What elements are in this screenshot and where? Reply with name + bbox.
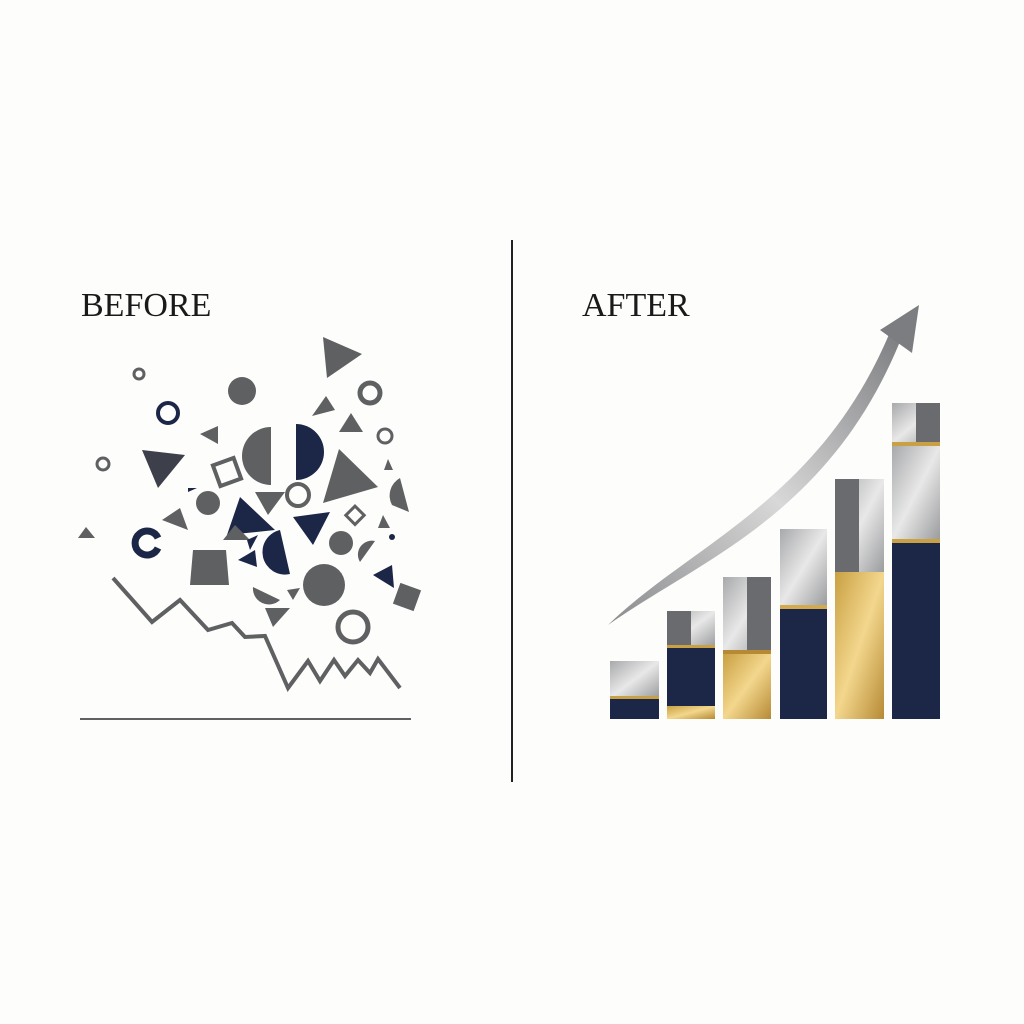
bar 4 [780,529,827,719]
title: after: AFTER [582,287,690,324]
bar 1 [610,661,659,719]
title: before: BEFORE [81,287,211,324]
bar 2 [667,611,715,719]
before: declining zigzag line [113,578,400,688]
after: rising arrow [608,305,919,625]
before: baseline [80,718,411,720]
bar 5 [835,479,884,719]
after: bar chart [610,403,940,719]
divider [511,240,513,782]
before: scattered shapes [78,337,421,642]
bar 3 [723,577,771,719]
bar 6 [892,403,940,719]
